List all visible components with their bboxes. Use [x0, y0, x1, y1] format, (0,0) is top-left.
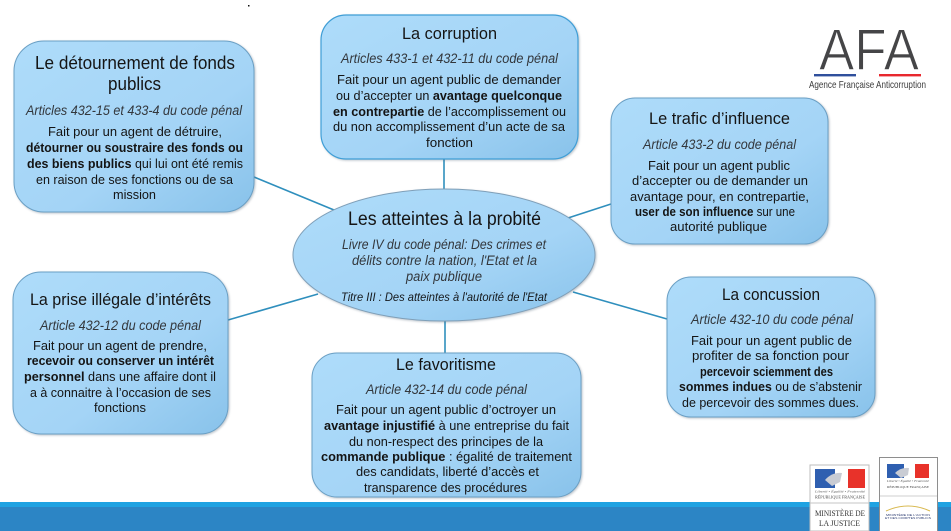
panel: le trafic d'influence: Le trafic d’influence: [649, 110, 790, 128]
panel: le trafic d'influence: Fait pour un agent public: [648, 158, 790, 173]
panel: la prise illégale d'intérêts: Article 432-12 du code pénal: [39, 318, 202, 333]
panel: la concussion: La concussion: [722, 286, 820, 304]
panel: la concussion: profiter de sa fonction pour: [692, 348, 850, 363]
panel: le favoritisme: avantage injustifié à une entreprise du fait: [324, 418, 569, 433]
footer band: [0, 502, 951, 531]
panel: la corruption: du non accomplissement d’un acte de sa: [333, 119, 566, 134]
panel: détournement de fonds publics: publics: [108, 74, 161, 94]
panel: la corruption: Fait pour un agent public de demander: [337, 72, 562, 87]
panel: la concussion: Fait pour un agent public de: [691, 333, 852, 348]
panel: les atteintes à la probité (centre): délits contre la nation, l'Etat et la: [352, 253, 537, 268]
logo: AFA: AFA: [819, 18, 919, 83]
panel: la corruption: [321, 15, 578, 159]
panel: le trafic d'influence: user de son influence sur une: [635, 204, 795, 219]
logo: ministère de l'action et des comptes publics: MINISTÈRE DE L'ACTION: [886, 512, 930, 517]
panel: la concussion: de percevoir des sommes dues.: [682, 395, 859, 410]
panel: la prise illégale d'intérêts: recevoir ou conserver un intérêt: [27, 353, 215, 368]
panel: la prise illégale d'intérêts: [13, 272, 228, 434]
connector lines: [228, 159, 667, 353]
logo: ministère de la justice: Liberté • Égalité • Fraternité: [814, 488, 866, 494]
logo: ministère de la justice: LA JUSTICE: [819, 519, 860, 528]
panel: la corruption: La corruption: [402, 25, 497, 43]
panel: la concussion: percevoir sciemment des: [700, 364, 833, 379]
logo: ministère de l'action et des comptes publics: ET DES COMPTES PUBLICS: [885, 516, 931, 520]
panel: le trafic d'influence: d’accepter ou de demander un: [632, 173, 808, 188]
panel: le favoritisme: Article 432-14 du code pénal: [365, 382, 528, 397]
panel: le favoritisme: [312, 353, 581, 497]
panel: le trafic d'influence: avantage pour, en contrepartie,: [630, 189, 809, 204]
panel: les atteintes à la probité (centre): Livre IV du code pénal: Des crimes et: [342, 237, 547, 252]
panel: les atteintes à la probité (centre): Les atteintes à la probité: [348, 209, 541, 230]
panel: les atteintes à la probité (centre): [293, 189, 595, 321]
panel: détournement de fonds publics: [14, 41, 254, 212]
panel: les atteintes à la probité (centre): Titre III : Des atteintes à l'autorité de l'Etat: [341, 290, 548, 304]
logo: ministère de la justice: RÉPUBLIQUE FRANÇAISE: [815, 494, 866, 500]
panel: la concussion: Article 432-10 du code pénal: [690, 312, 854, 327]
panel: la corruption: en contrepartie de l’accomplissement ou: [333, 104, 566, 119]
panel: détournement de fonds publics: Le détournement de fonds: [35, 53, 235, 73]
panel: le favoritisme: commande publique : égalité de traitement: [321, 449, 572, 464]
panel: la prise illégale d'intérêts: personnel dans une affaire dont il: [24, 369, 216, 384]
panel: le favoritisme: Fait pour un agent public d’octroyer un: [336, 402, 556, 417]
logo: ministère de l'action et des comptes publics: [880, 458, 938, 531]
panel: le favoritisme: transparence des procédures: [364, 480, 527, 495]
logo: ministère de la justice: MINISTÈRE DE: [815, 508, 865, 518]
panel: le trafic d'influence: [611, 98, 828, 244]
panel: le favoritisme: des candidats, liberté d’accès et: [356, 464, 539, 479]
panel: détournement de fonds publics: détourner ou soustraire des fonds ou: [26, 140, 243, 155]
panel: la prise illégale d'intérêts: Fait pour un agent de prendre,: [33, 338, 207, 353]
panel: les atteintes à la probité (centre): paix publique: [405, 269, 482, 284]
panel: la prise illégale d'intérêts: La prise illégale d’intérêts: [30, 291, 211, 309]
panel: la concussion: [667, 277, 875, 417]
logo: ministère de la justice: [810, 465, 869, 531]
panel: la concussion: sommes indues ou de s’abstenir: [679, 379, 863, 394]
panel: détournement de fonds publics: en raison de ses fonctions ou de sa: [36, 172, 234, 187]
panel: la corruption: fonction: [426, 135, 473, 150]
logo: ministère de l'action et des comptes publics: RÉPUBLIQUE FRANÇAISE: [887, 484, 929, 489]
panel: le favoritisme: du non-respect des principes de la: [349, 434, 544, 449]
panel: le trafic d'influence: Article 433-2 du code pénal: [642, 137, 797, 152]
panel: détournement de fonds publics: mission: [113, 187, 156, 202]
panel: le trafic d'influence: autorité publique: [670, 219, 767, 234]
panel: détournement de fonds publics: des biens publics qui lui ont été remis: [27, 156, 243, 171]
panel: la corruption: Articles 433-1 et 432-11 du code pénal: [340, 51, 559, 66]
panel: la prise illégale d'intérêts: fonctions: [94, 400, 146, 415]
logo: ministère de l'action et des comptes publics: Liberté • Égalité • Fraternité: [886, 478, 930, 483]
panel: détournement de fonds publics: Fait pour un agent de détruire,: [48, 124, 222, 139]
panel: le favoritisme: Le favoritisme: [396, 356, 496, 374]
panel: détournement de fonds publics: Articles 432-15 et 433-4 du code pénal: [25, 103, 243, 118]
panel: la corruption: ou d’accepter un avantage quelconque: [336, 88, 562, 103]
panel: la prise illégale d'intérêts: a à connaitre à l’occasion de ses: [30, 385, 211, 400]
